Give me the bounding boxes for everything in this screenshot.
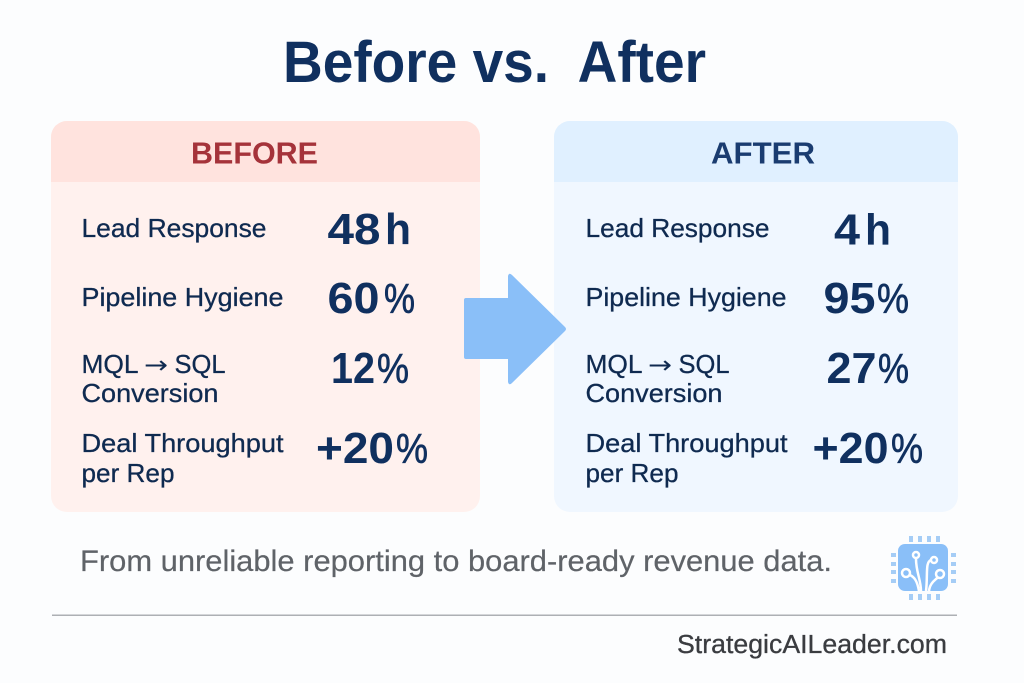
before row: MQL to SQL conversion: 12 bbox=[331, 345, 375, 393]
after row: MQL to SQL conversion: SQL bbox=[678, 349, 730, 379]
after row: MQL to SQL conversion bbox=[586, 345, 909, 408]
before row: deal throughput bbox=[82, 425, 428, 488]
before heading: BEFORE bbox=[191, 136, 318, 170]
before row: lead response: h bbox=[385, 206, 411, 254]
after row: pipeline hygiene bbox=[586, 275, 909, 323]
after row: deal throughput: per Rep bbox=[586, 458, 678, 488]
before row: deal throughput: per Rep bbox=[82, 458, 174, 488]
website credit: StrategicAILeader.com bbox=[677, 631, 947, 659]
before header band bbox=[51, 121, 480, 182]
before row: MQL to SQL conversion bbox=[82, 345, 409, 408]
tagline: From unreliable reporting to board-ready revenue data. bbox=[80, 545, 832, 578]
before row: MQL to SQL conversion: Conversion bbox=[82, 378, 218, 408]
before row: lead response bbox=[82, 206, 411, 254]
before row: pipeline hygiene bbox=[82, 275, 415, 323]
before row: lead response: 48 bbox=[328, 206, 380, 254]
title: Before vs. After bbox=[283, 30, 706, 95]
after row: deal throughput: +20 bbox=[812, 425, 888, 473]
after header band bbox=[554, 121, 958, 182]
after row: MQL to SQL conversion: % bbox=[878, 345, 909, 392]
before row: MQL to SQL conversion: % bbox=[377, 345, 409, 392]
before row: MQL to SQL conversion: SQL bbox=[174, 349, 226, 379]
after row: MQL to SQL conversion: 27 bbox=[826, 345, 876, 393]
before row: lead response: Lead Response bbox=[82, 213, 266, 243]
after row: deal throughput: Deal Throughput bbox=[586, 428, 788, 458]
arrow: before to after bbox=[464, 274, 566, 384]
after row: deal throughput: % bbox=[891, 425, 923, 472]
after row: lead response bbox=[586, 206, 891, 254]
after row: pipeline hygiene: % bbox=[877, 275, 909, 322]
before row: MQL to SQL conversion: → bbox=[144, 351, 168, 379]
before row: pipeline hygiene: % bbox=[384, 275, 415, 322]
icon: AI chip bbox=[891, 536, 956, 600]
after row: pipeline hygiene: Pipeline Hygiene bbox=[586, 282, 786, 312]
before row: deal throughput: Deal Throughput bbox=[82, 428, 284, 458]
after row: deal throughput bbox=[586, 425, 923, 488]
before row: deal throughput: +20 bbox=[316, 425, 394, 473]
divider line bbox=[52, 614, 957, 616]
before row: deal throughput: % bbox=[396, 425, 428, 472]
after row: MQL to SQL conversion: → bbox=[648, 351, 672, 379]
panel: before bbox=[51, 121, 480, 512]
after row: MQL to SQL conversion: MQL bbox=[586, 349, 642, 379]
panel: after bbox=[554, 121, 958, 512]
before row: pipeline hygiene: Pipeline Hygiene bbox=[82, 282, 284, 312]
after row: pipeline hygiene: 95 bbox=[824, 275, 876, 323]
after row: lead response: Lead Response bbox=[586, 213, 770, 243]
after row: lead response: h bbox=[865, 206, 891, 254]
after heading: AFTER bbox=[711, 136, 815, 170]
after row: lead response: 4 bbox=[834, 206, 860, 254]
before row: MQL to SQL conversion: MQL bbox=[82, 349, 138, 379]
after row: MQL to SQL conversion: Conversion bbox=[586, 378, 722, 408]
before row: pipeline hygiene: 60 bbox=[328, 275, 380, 323]
